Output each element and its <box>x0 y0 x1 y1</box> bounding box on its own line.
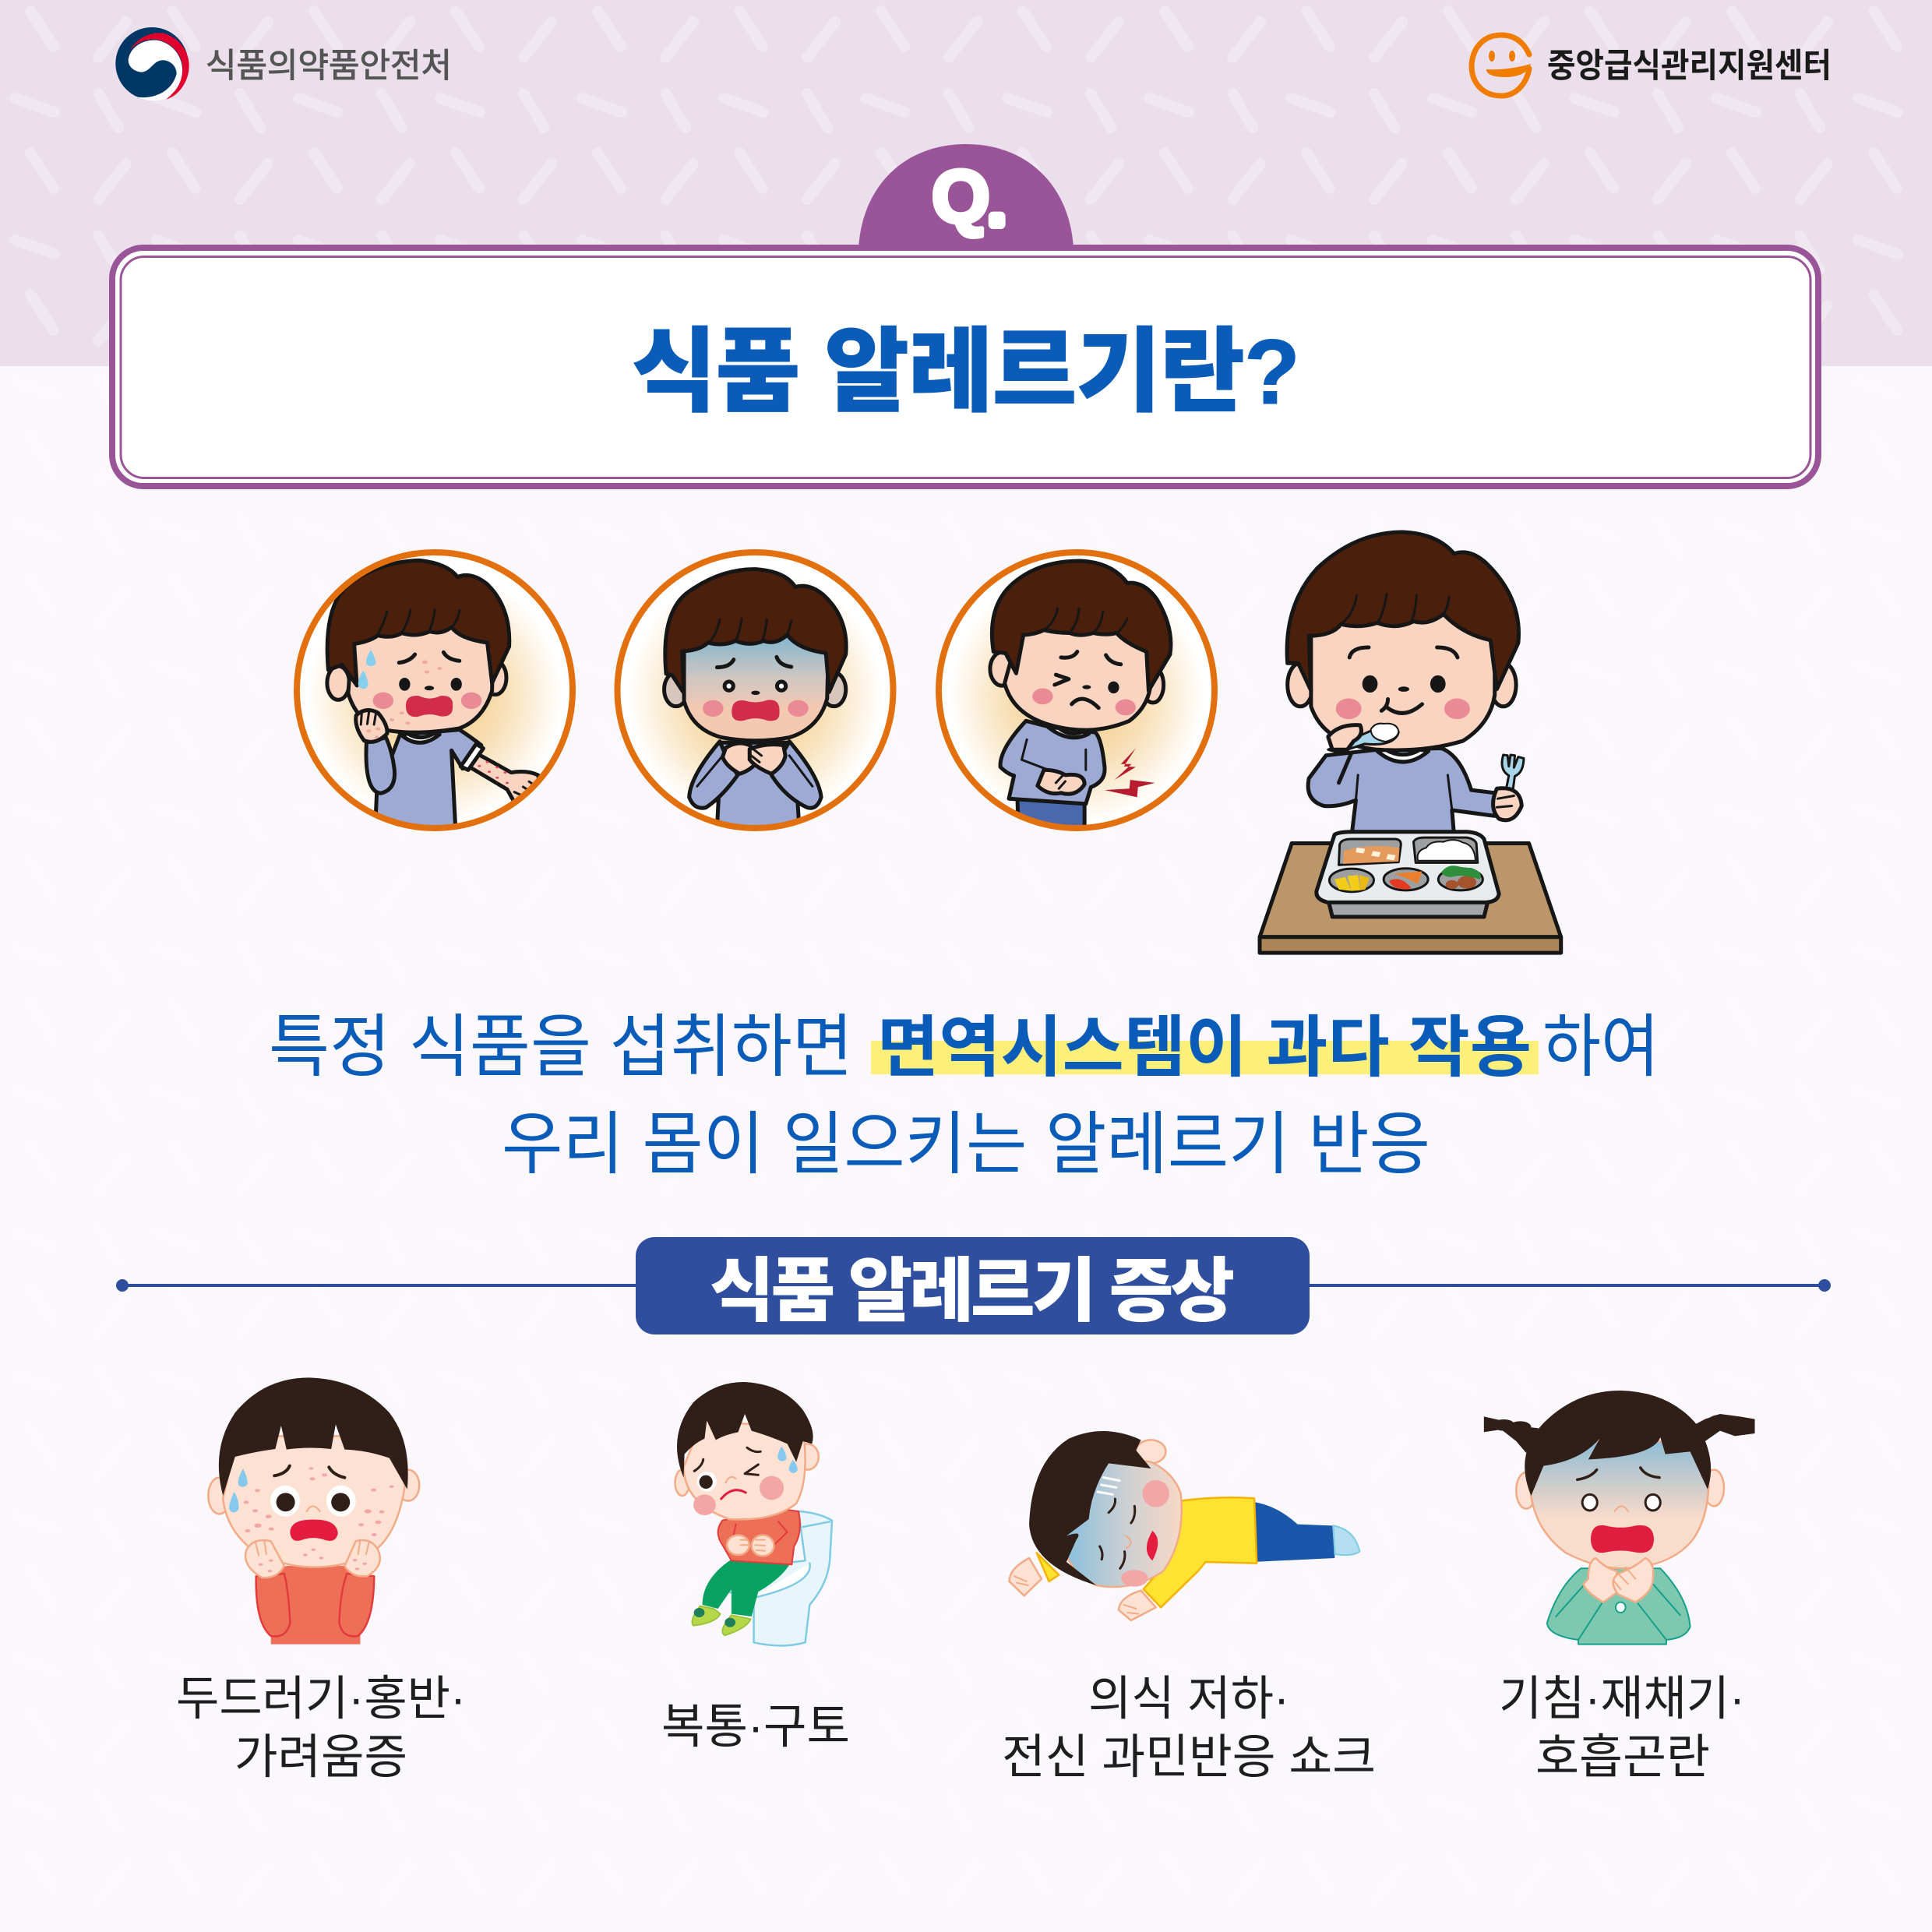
caption <box>176 1672 466 1783</box>
icon: orange smile <box>1472 35 1531 96</box>
lunch tray <box>1317 832 1499 917</box>
caption: 의식 저하· <box>1088 1672 1289 1725</box>
center name: 중앙급식관리지원센터 <box>1547 48 1832 85</box>
caption: 기침·재채기· <box>1499 1672 1745 1725</box>
header text: 식품 알레르기 증상 <box>710 1253 1235 1331</box>
definition text <box>269 1008 1659 1183</box>
caption: 두드러기·홍반· <box>176 1672 466 1725</box>
table <box>1260 844 1561 953</box>
section header: food allergy symptoms <box>116 1237 1831 1334</box>
title panel <box>112 248 1818 486</box>
line 1: 하여 <box>1542 1008 1659 1085</box>
illustration: boy with breathing difficulty in circle <box>617 552 894 829</box>
line 1: 면역시스템이 과다 작용 <box>877 1010 1532 1085</box>
symptom: hives and itching <box>176 1377 466 1783</box>
caption: 전신 과민반응 쇼크 <box>1002 1730 1376 1783</box>
highlight <box>871 1041 1539 1074</box>
icon: child on toilet <box>675 1382 832 1645</box>
organization name: 식품의약품안전처 <box>206 48 452 85</box>
title text: 식품 알레르기란? <box>632 321 1300 424</box>
line 1 <box>269 1008 1659 1085</box>
caption: 호흡곤란 <box>1535 1730 1710 1783</box>
line 1: 특정 식품을 섭취하면 <box>269 1008 853 1085</box>
symptom: stomach pain and vomiting <box>661 1382 850 1753</box>
Q tab <box>858 144 1074 249</box>
caption <box>1499 1672 1745 1783</box>
logo: Ministry of Food and Drug Safety <box>115 27 452 100</box>
icon: taegeuk emblem <box>115 27 189 100</box>
logo: Central Food Service Support Center <box>1472 35 1832 96</box>
line 2: 우리 몸이 일으키는 알레르기 반응 <box>502 1105 1430 1183</box>
icon: girl coughing <box>1484 1391 1755 1645</box>
Q label: Q <box>932 155 990 238</box>
icon: child collapsed on the floor <box>1010 1431 1359 1620</box>
header badge <box>636 1237 1310 1334</box>
symptom: cough, sneezing and breathing difficulty <box>1484 1391 1755 1783</box>
caption <box>1002 1672 1376 1783</box>
divider line <box>116 1279 1831 1292</box>
caption: 복통·구토 <box>661 1700 850 1753</box>
caption: 가려움증 <box>234 1730 407 1783</box>
illustration: boy with hives in circle <box>296 552 573 829</box>
Q label: . <box>989 175 1004 236</box>
illustration: boy eating school lunch <box>1260 532 1561 953</box>
symptom: loss of consciousness and anaphylactic shock <box>1002 1431 1376 1783</box>
illustration: boy with stomach ache in circle <box>938 552 1215 832</box>
icon: child with rash <box>208 1377 419 1645</box>
